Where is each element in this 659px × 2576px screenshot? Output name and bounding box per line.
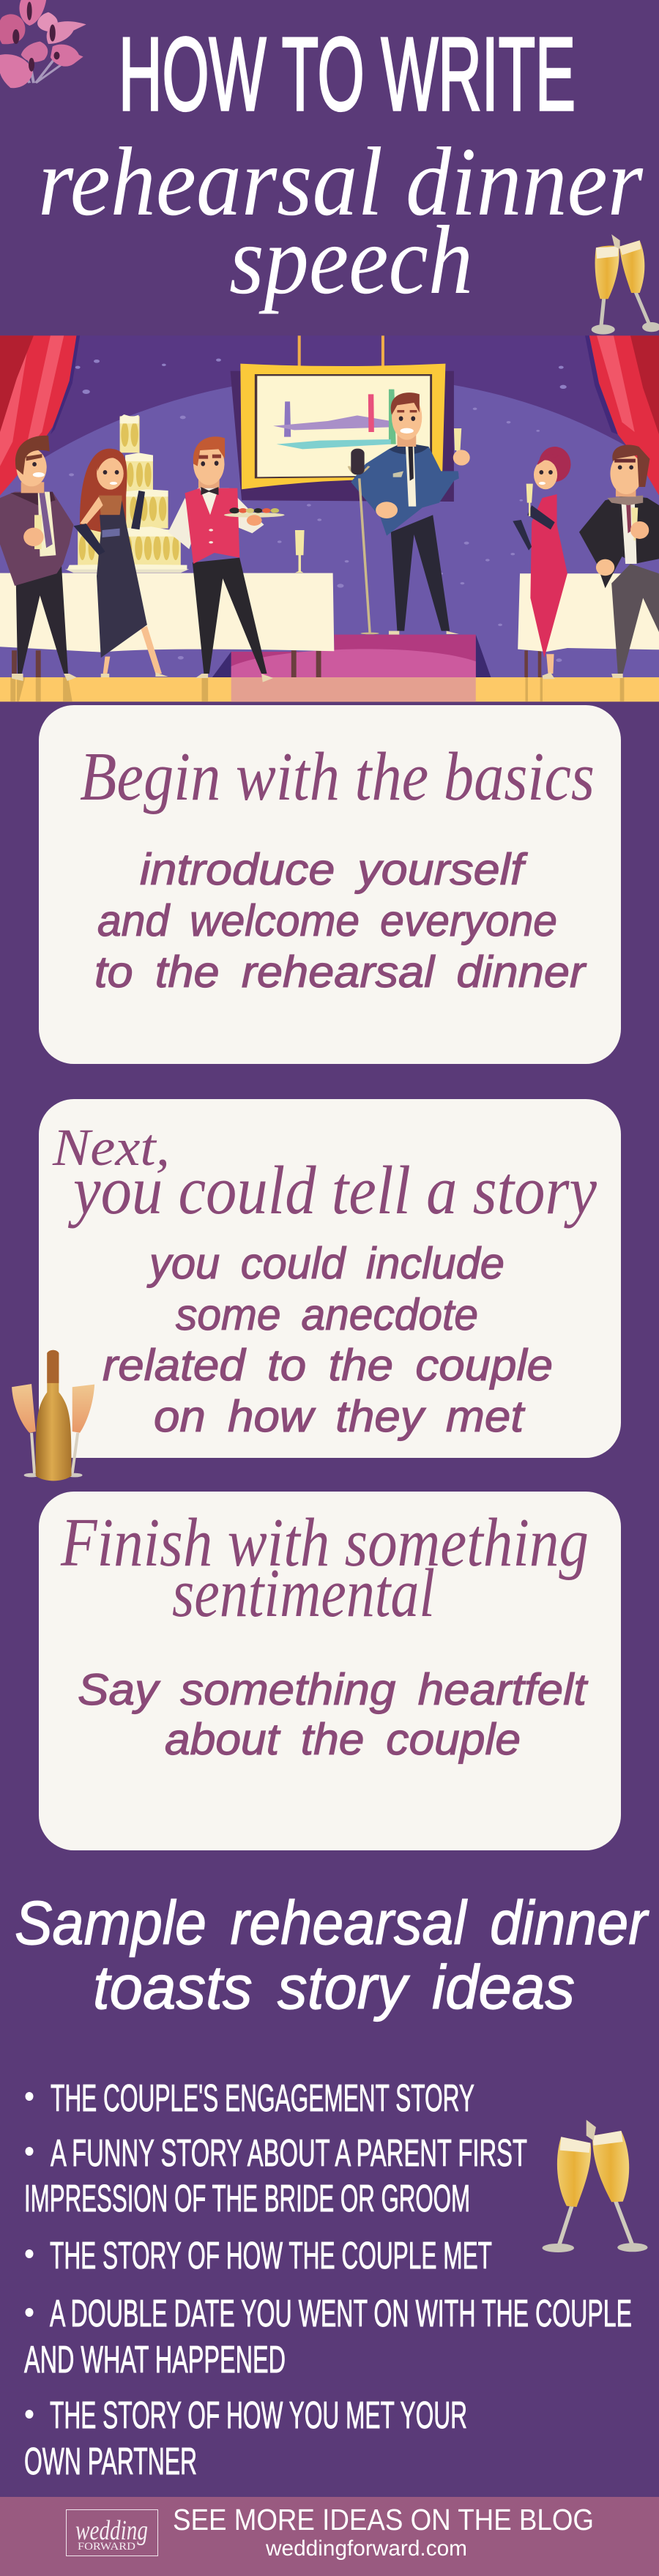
- text block: anecdote: some anecdote: [176, 1290, 478, 1339]
- logo: wedding forward: [66, 2510, 158, 2555]
- glass on table: [295, 530, 305, 573]
- heading: sentimental: sentimental: [172, 1555, 435, 1631]
- text block: anecdote: [103, 1239, 553, 1441]
- spotlight: [0, 376, 659, 677]
- painting strokes: [273, 390, 396, 449]
- heading: you could tell a story: you could tell a story: [68, 1153, 597, 1229]
- heading: sample rehearsal dinner toasts: [15, 1888, 649, 2022]
- heading: begin with the basics: Begin with the basics: [80, 739, 595, 815]
- wall: [0, 335, 659, 677]
- panel: begin with the basics: [39, 705, 621, 1064]
- picture shadow: [231, 371, 454, 502]
- floor: [0, 677, 659, 701]
- footer banner: [0, 2497, 659, 2576]
- heading: sample rehearsal dinner toasts: toasts story ideas: [93, 1953, 575, 2022]
- illustration: dinner party stage scene: [0, 335, 659, 701]
- text block: heartfelt: about the couple: [165, 1715, 521, 1764]
- logo: wedding forward: FORWARD: [78, 2541, 135, 2553]
- hanging posts: [299, 335, 383, 366]
- footer call to action: SEE MORE IDEAS ON THE BLOG: [173, 2503, 594, 2536]
- curtains: [0, 335, 76, 496]
- list: story ideas: AND WHAT HAPPENED: [24, 2339, 286, 2381]
- tables: [12, 650, 17, 677]
- painting canvas: [255, 374, 432, 478]
- text block: heartfelt: [78, 1665, 588, 1764]
- footer website: weddingforward.com: [265, 2536, 467, 2561]
- text block: heartfelt: Say something heartfelt: [78, 1665, 588, 1714]
- title: speech script: speech: [229, 206, 473, 314]
- text block: anecdote: related to the couple: [103, 1341, 553, 1390]
- icon: champagne flutes top right: [592, 234, 659, 335]
- text block: anecdote: you could include: [146, 1239, 505, 1288]
- icon: pink flowers: [0, 0, 86, 88]
- speaker with microphone: [349, 392, 470, 635]
- panel: tell a story: [39, 1099, 621, 1458]
- panel: finish with something sentimental: [39, 1492, 621, 1850]
- text block: introduction: to the rehearsal dinner: [94, 948, 587, 997]
- list: story ideas: OWN PARTNER: [24, 2441, 197, 2483]
- woman in red dress: [513, 447, 570, 679]
- floor reflections: [10, 677, 624, 701]
- woman in navy dress: [73, 449, 168, 677]
- heading: next: Next,: [52, 1118, 170, 1177]
- text block: introduction: and welcome everyone: [97, 896, 557, 945]
- text block: introduction: introduce yourself: [140, 845, 528, 894]
- logo: wedding forward: wedding: [75, 2515, 148, 2546]
- text block: anecdote: on how they met: [154, 1392, 525, 1441]
- waiter: [168, 436, 285, 682]
- icon: gold bottle and glasses: [12, 1350, 94, 1481]
- stage: [212, 635, 491, 677]
- gold frame: [240, 364, 445, 489]
- champagne tower: [65, 414, 189, 573]
- speckles: [69, 359, 567, 662]
- man right: [579, 445, 659, 678]
- man left: [0, 436, 76, 681]
- text block: introduction: [94, 845, 587, 997]
- heading: finish with something: Finish with something: [60, 1505, 589, 1581]
- icon: champagne flutes bottom right: [542, 2120, 648, 2252]
- list: story ideas: [24, 2077, 632, 2483]
